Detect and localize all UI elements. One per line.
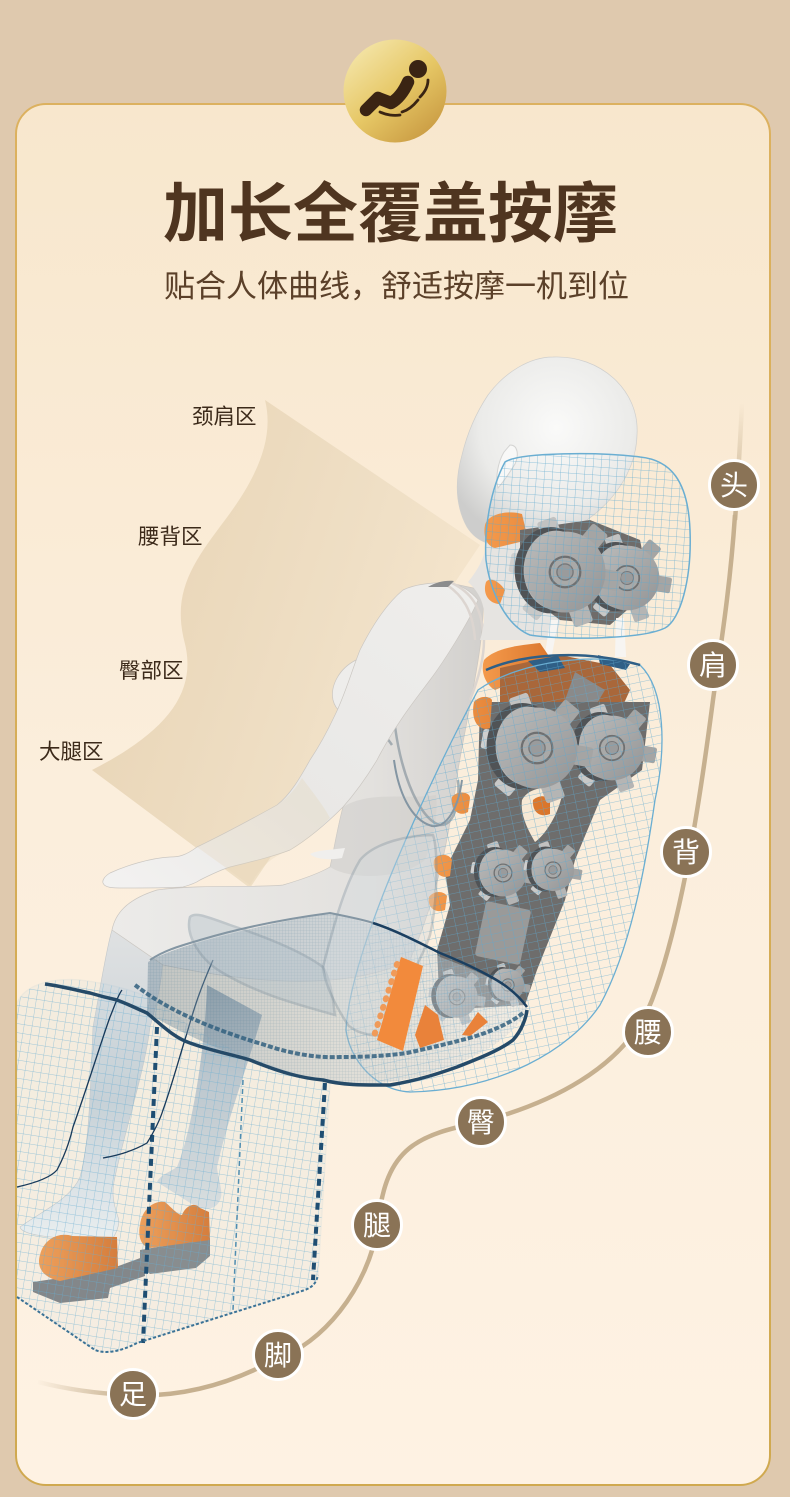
ear [497,445,517,488]
leg rest inner seam [233,1080,243,1310]
lumbar lobe [323,835,436,1035]
foot base far [140,1238,210,1274]
marker: foot [108,1370,158,1418]
leg: near leg [20,930,163,1239]
marker: foot: 足 [119,1379,147,1410]
chest [332,660,356,716]
orange roller tip upper back [483,643,555,690]
leg rest dark seams [143,1027,325,1343]
leg: far leg [157,985,262,1209]
torso and thigh [112,583,483,981]
upper back waffle [500,655,630,712]
upper back gear right [567,703,657,793]
neck support plate [520,520,650,625]
label: thigh zone: 大腿区 [39,740,104,764]
label: hip zone: 臀部区 [119,659,184,683]
seat cushion wire mesh [45,760,527,1085]
neck gear left [508,516,622,628]
block face [377,957,423,1051]
piping wires [17,960,213,1187]
sweep tint over forearm [197,778,330,885]
neck gear right [582,533,672,623]
block pegs [374,964,397,1036]
seat body tint [147,913,527,1084]
orange side rollers [429,697,550,911]
arm and hand [103,583,478,888]
seat top dark curve [373,923,527,1007]
marker: back: 背 [672,837,700,868]
marker: foot sole: 脚 [264,1340,292,1371]
foot base near [33,1257,145,1303]
headrest mesh [486,454,690,638]
blue bracket [528,655,630,672]
foot mechanism [33,1202,210,1303]
orange neck rollers [484,512,605,604]
seat second piping [135,985,523,1057]
top dark rim of backrest [486,655,640,670]
central frame plate [437,702,650,1010]
tank top straps [447,583,484,700]
marker: foot sole [254,1330,302,1380]
shoulder grey pad [428,581,454,587]
waist shadow [330,795,437,876]
head [457,357,637,543]
lower gear right [485,963,531,1007]
foot roller far [139,1202,210,1248]
body curve line [38,403,742,1395]
marker: shoulder [688,640,738,690]
neck [468,515,590,640]
backrest mesh [346,659,662,1092]
seat front dark piping [45,984,527,1085]
bra strap [352,690,458,825]
figure: seated woman [20,357,637,1239]
marker: waist [624,1008,672,1056]
middle gear left [470,841,536,905]
marker: hip: 臀 [467,1107,495,1138]
leg rest tint [17,980,330,1352]
leg rest body [17,980,330,1352]
marker: head: 头 [720,470,748,501]
middle gear right [523,841,583,899]
label: waist back zone: 腰背区 [138,525,203,549]
marker: thigh: 腿 [363,1210,391,1241]
bra cup lines [394,760,462,826]
back cushion wire mesh [346,454,690,1092]
label: neck shoulder zone: 颈肩区 [192,405,257,429]
marker: head [710,460,758,510]
other hand [310,848,345,859]
block lower pieces [415,1005,488,1048]
seat top wave [150,913,373,960]
thigh lobe [189,915,335,1015]
subtitle: 贴合人体曲线，舒适按摩一机到位 [164,269,629,304]
lower frame plate [475,901,531,965]
leg rest wire mesh [17,960,330,1352]
marker: waist: 腰 [634,1017,662,1048]
marker: hip [456,1098,506,1146]
beige gap in frame [522,788,562,842]
marker: shoulder: 肩 [699,650,727,681]
seat dense mesh [147,913,527,1084]
upper back gear left [480,692,594,804]
massage mechanism [428,512,672,1026]
leg rest bottom edge [17,1275,318,1352]
foot roller near [39,1235,118,1281]
marker: back [662,828,710,876]
title: 加长全覆盖按摩 [163,177,618,250]
orange lower waffle block [374,957,488,1051]
massage range beige sweep [92,400,480,888]
lower gear [428,968,486,1026]
back connector posts [546,620,624,660]
icon: gold massage badge [344,40,446,142]
frame grey chips [565,672,605,715]
marker: thigh [352,1200,402,1250]
